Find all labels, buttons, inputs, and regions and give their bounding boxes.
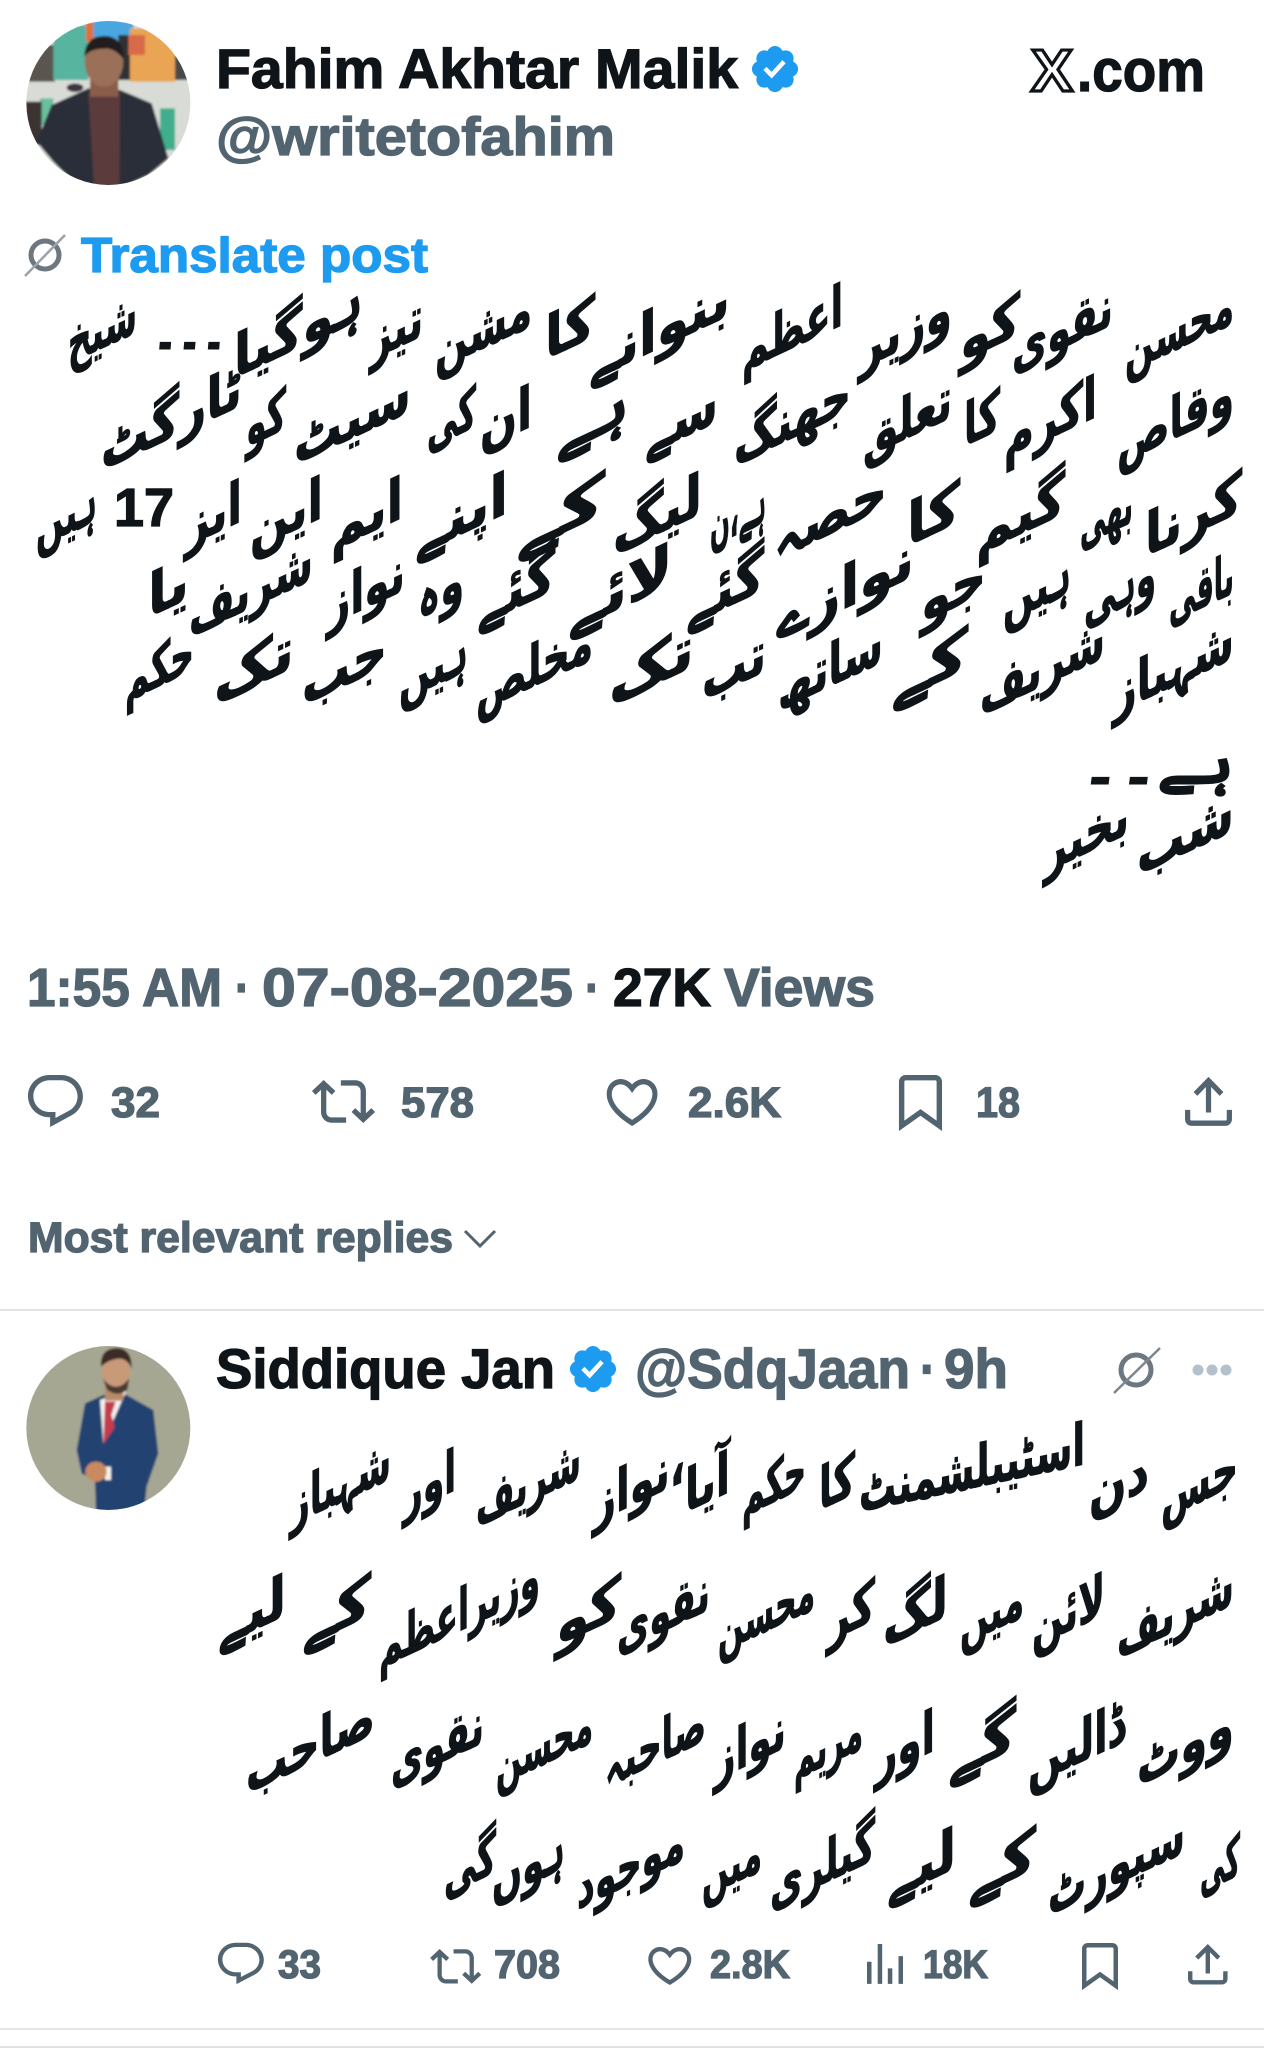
author name: Fahim Akhtar Malik <box>216 37 739 100</box>
author handle: @writetofahim <box>216 107 615 167</box>
icon: bookmark <box>1082 1943 1118 1990</box>
post text: line 1: اعظم <box>742 271 843 386</box>
post text: line 1: وزیر <box>857 273 952 385</box>
reply text: line 4: لیے <box>887 1815 956 1914</box>
post text: line 5: تب <box>702 618 766 715</box>
reply text: line 3: اور <box>873 1697 935 1793</box>
reply text: line 1: ،نواز <box>591 1427 685 1539</box>
post text: line 4: وہی <box>1084 538 1156 639</box>
reply text: line 3: نواز <box>712 1694 786 1796</box>
timestamp and views <box>27 958 875 1018</box>
post text: line 2: سے <box>645 368 718 469</box>
post text: line 1: مشن <box>435 272 532 385</box>
reply text: line 3 <box>246 1681 1234 1808</box>
reply text: line 3: گے <box>948 1695 1016 1794</box>
post text: line 6: ہے۔۔ <box>1081 729 1234 797</box>
reply stat: replies <box>218 1943 321 1987</box>
post text: line 1: شیخ <box>68 279 137 378</box>
X.com logo: X <box>1031 38 1073 104</box>
post text: line 4: نوازے <box>776 523 914 655</box>
post text: line 2: ہے <box>556 368 629 469</box>
post text: line 1: ہوگیا <box>234 265 363 392</box>
post text: line 3: ایم <box>331 464 403 565</box>
post text: line 2: ٹارگٹ <box>101 352 242 485</box>
post text: line 3: ہے،ن <box>710 468 766 561</box>
reply text: line 4: کے <box>968 1815 1036 1914</box>
reply handle and time: · <box>920 1337 936 1400</box>
reply text: line 1: دن <box>1089 1435 1149 1530</box>
icon: translate <box>25 235 65 276</box>
post text: line 4: وہ <box>418 544 464 633</box>
reply text: line 2: میں <box>960 1563 1024 1660</box>
avatar: Siddique Jan <box>26 1346 190 1510</box>
post text: line 3: کے <box>516 460 606 569</box>
icon: share <box>1185 1077 1232 1126</box>
translate link: Translate post <box>81 229 428 283</box>
post text: line 2: کا <box>964 376 1000 461</box>
stat: reposts: 578 <box>401 1079 474 1127</box>
post text: line 5: تک <box>214 614 294 719</box>
post text: line 3: ہیں <box>36 467 97 562</box>
post text: line 5: ہیں <box>399 617 468 716</box>
reply text: line 1: کا <box>819 1440 855 1525</box>
reply text: line 2: لائن <box>1032 1561 1105 1662</box>
reply text: line 1: اور <box>401 1436 456 1529</box>
post text: line 5: حکم <box>125 617 194 716</box>
icon: verified badge <box>752 46 798 92</box>
post text: line 4: یا <box>148 545 189 632</box>
post text: line 3: بھی <box>1080 468 1133 561</box>
post text: line 3: کا <box>907 468 960 561</box>
icon: more dots <box>1192 1364 1232 1376</box>
replies sort label: Most relevant replies <box>28 1214 453 1262</box>
post text: line 3 <box>36 454 1242 575</box>
post text: line 5: کے <box>891 615 969 718</box>
reply text: line 1: اسٹیبلشمنٹ <box>859 1411 1085 1526</box>
post text: line 1: کو <box>958 281 1020 377</box>
reply stat: likes <box>648 1943 790 1987</box>
reply text: line 4: گی <box>444 1819 496 1910</box>
reply text: line 4: سپورٹ <box>1048 1799 1185 1930</box>
post text: line 3: اپنے <box>415 459 508 570</box>
reply text: line 3: ڈالیں <box>1028 1687 1127 1801</box>
reply stat: reposts <box>430 1943 560 1987</box>
reply text: line 4: موجود <box>577 1806 685 1923</box>
timestamp and views: 1:55 AM <box>27 958 222 1018</box>
post text: line 2 <box>101 352 1234 485</box>
X.com logo: .com <box>1077 38 1205 104</box>
reply text: line 2: نقوی <box>617 1556 710 1667</box>
reply text: line 1 <box>288 1411 1238 1542</box>
post text: line 5: تک <box>609 613 694 720</box>
reply text: line 4: گیلری <box>770 1806 875 1923</box>
reply text: line 2: وزیراعظم <box>379 1540 540 1683</box>
icon: share <box>1188 1944 1228 1984</box>
reply text: line 2: لگ <box>883 1563 948 1660</box>
reply text: line 3: نقوی <box>391 1689 484 1800</box>
timestamp and views: · <box>585 958 600 1018</box>
timestamp and views: Views <box>724 958 875 1018</box>
reply text: line 1: آیا <box>685 1435 731 1527</box>
reply text: line 1: حکم <box>742 1434 806 1531</box>
post text: line 4: لائے <box>568 530 673 647</box>
reply text: line 3: محسن <box>496 1688 593 1801</box>
reply text: line 3: ووٹ <box>1137 1688 1234 1801</box>
reply text: line 4 <box>444 1799 1240 1930</box>
icon: translate <box>1114 1348 1160 1393</box>
reply stat: replies: 33 <box>278 1943 321 1987</box>
stat: replies <box>28 1075 160 1127</box>
stat: likes: 2.6K <box>688 1079 781 1127</box>
timestamp and views: 27K <box>613 958 711 1018</box>
reply text: line 1: شریف <box>476 1424 581 1541</box>
reply text: line 2: لیے <box>218 1562 286 1661</box>
reply text: line 2: کے <box>302 1562 371 1661</box>
post text: line 3: ایز <box>183 468 242 563</box>
post text: line 5: شریف <box>980 604 1105 729</box>
post text: line 2: اکرم <box>1004 363 1097 474</box>
reply stat: views: 18K <box>923 1943 988 1987</box>
post text: line 1 <box>68 262 1234 395</box>
stat: reposts <box>312 1079 474 1127</box>
reply text: line 4: میں <box>702 1817 762 1912</box>
post text: line 1: نقوی <box>1012 271 1113 386</box>
post text: line 1: کا <box>545 283 595 374</box>
post text: line 3: حصہ <box>774 454 887 575</box>
post text: line 4: گئے <box>477 536 555 640</box>
reply text: line 2: کر <box>825 1566 875 1657</box>
post text: line 3: لیگ <box>613 460 702 569</box>
post text: line 5: مخلص <box>476 606 593 728</box>
reply text: line 3: مریم <box>794 1695 863 1794</box>
stat: likes <box>607 1079 781 1127</box>
reply text: line 2 <box>218 1540 1234 1683</box>
post text: line 7 <box>1042 777 1234 890</box>
reply text: line 2: کو <box>553 1562 621 1662</box>
reply handle and time: 9h <box>944 1337 1008 1400</box>
reply text: line 3: صاحبہ <box>605 1687 706 1802</box>
stat: bookmarks <box>899 1075 1020 1131</box>
post text: line 1: بنوانے <box>589 262 730 395</box>
post text: line 5: جب <box>302 613 387 720</box>
X.com logo <box>1031 38 1205 104</box>
reply stat: likes: 2.8K <box>710 1943 790 1987</box>
reply text: line 4: ہوں <box>492 1814 565 1915</box>
reply text: line 2: محسن <box>718 1555 815 1668</box>
post text: line 5 <box>125 604 1234 730</box>
reply author name: Siddique Jan <box>216 1337 555 1400</box>
post text: line 5: ساتھ <box>778 608 883 725</box>
post text: line 2: ان <box>480 373 532 464</box>
timestamp and views: 07-08-2025 <box>262 958 573 1018</box>
post text: line 4: ہیں <box>1003 539 1071 638</box>
icon: verified badge <box>570 1346 616 1392</box>
post text: line 3: این <box>250 464 323 565</box>
post text: line 3: کرنا <box>1145 458 1242 571</box>
reply text: line 3: صاحب <box>246 1681 375 1808</box>
reply text: line 1: شہباز <box>288 1425 391 1542</box>
post text: line 7: بخیر <box>1042 780 1129 888</box>
stat: replies: 32 <box>111 1079 160 1127</box>
reply handle and time: @SdqJaan <box>635 1337 910 1400</box>
post text: line 7: شب <box>1137 777 1234 890</box>
post text: line 2: کی <box>427 373 476 464</box>
post text: line 4: گئے <box>686 536 764 640</box>
post text: line 2: کو <box>244 375 286 462</box>
post text: line 2: سیٹ <box>294 358 411 480</box>
post text: line 4 <box>148 523 1234 655</box>
post text: line 1: ۔۔۔ <box>153 294 226 362</box>
reply stat: reposts: 708 <box>494 1943 560 1987</box>
stat: bookmarks: 18 <box>976 1079 1020 1127</box>
post text: line 2: جھنگ <box>734 358 851 480</box>
post text: line 1: تیز <box>368 282 423 375</box>
post text: line 4: شریف <box>189 526 313 651</box>
post text: line 2: تعلق <box>863 364 952 473</box>
timestamp and views: · <box>235 958 250 1018</box>
post text: line 3: گیم <box>976 460 1065 569</box>
post text: line 4: نواز <box>325 537 405 641</box>
reply stat: views <box>867 1943 988 1987</box>
post text: line 4: جو <box>919 540 986 639</box>
avatar: Fahim Akhtar Malik <box>26 21 190 185</box>
post text: number 17: 17 <box>114 478 174 538</box>
